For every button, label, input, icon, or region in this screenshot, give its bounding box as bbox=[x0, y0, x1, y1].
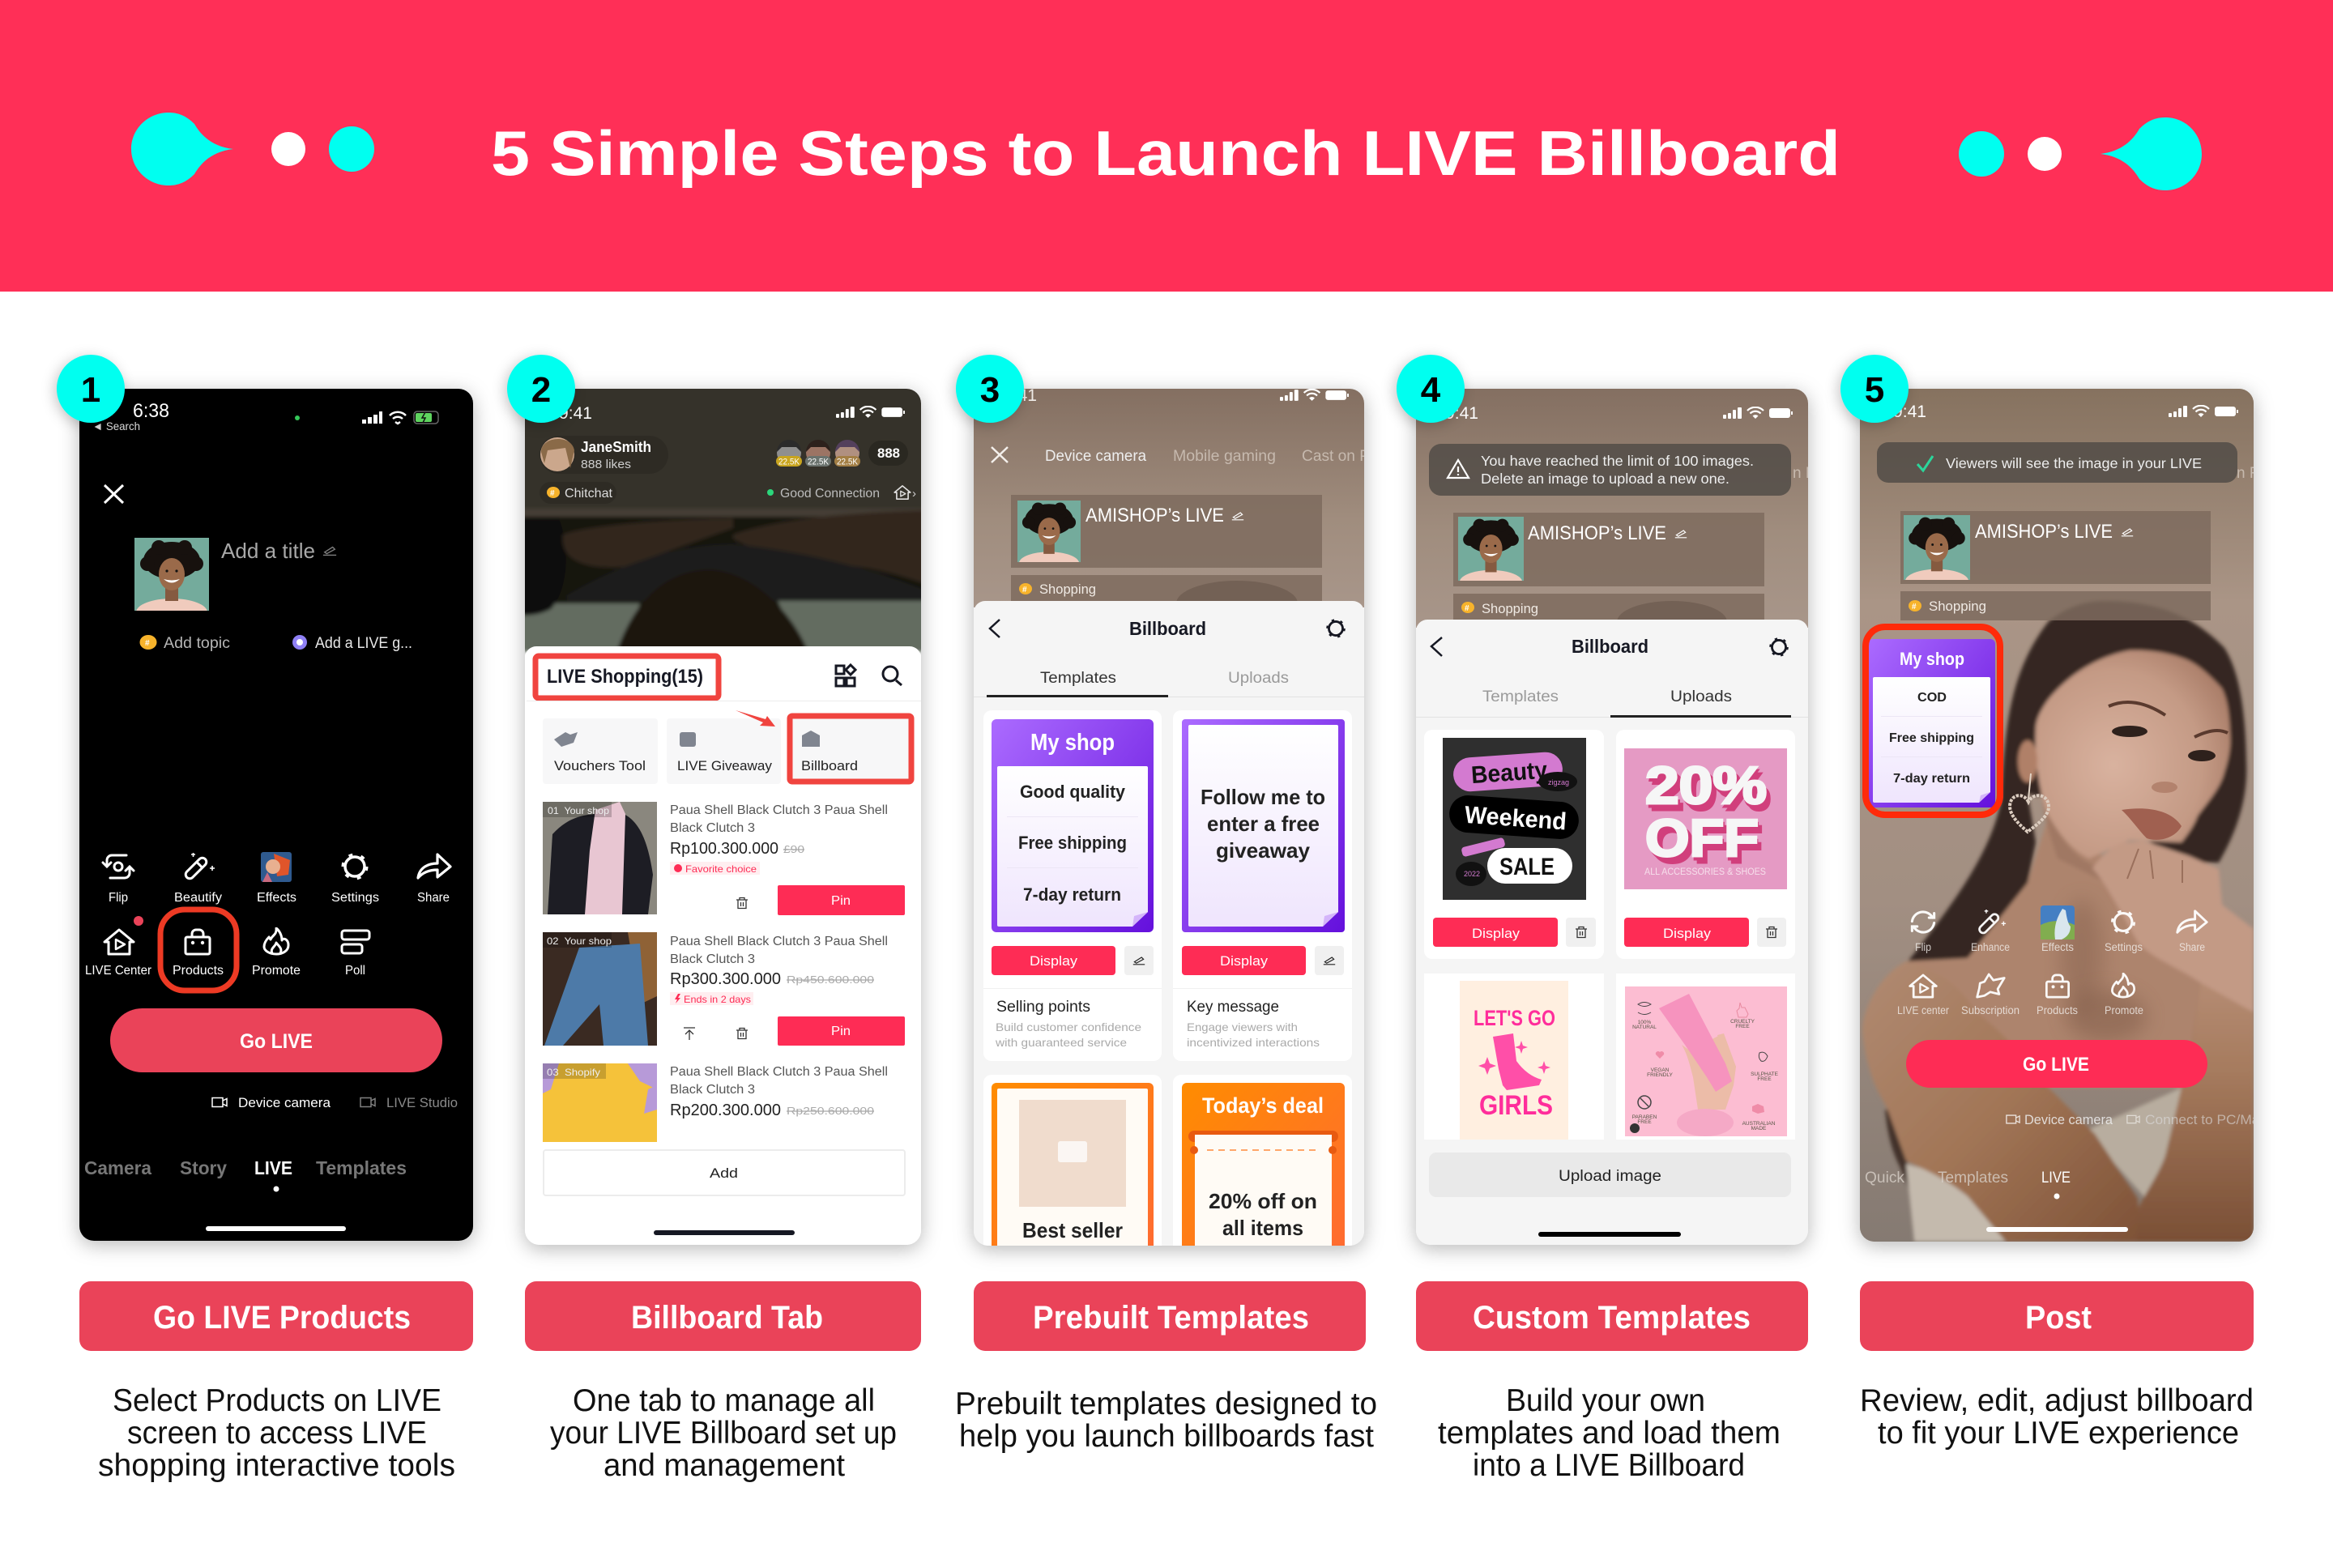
phone 3: prebuilt templates bbox=[974, 386, 1370, 1261]
step 1 heading bbox=[79, 1281, 473, 1351]
step 1 heading: Go LIVE Products bbox=[153, 1300, 411, 1336]
upload card: pink tube bbox=[1616, 974, 1795, 1140]
tool row 1: Effects bbox=[257, 891, 296, 905]
status bar: 6:38 bbox=[133, 400, 169, 422]
viewer avatars: 22.5K bbox=[837, 457, 859, 467]
product 3: Rp250.600.000 bbox=[787, 1105, 874, 1117]
mode tabs: Templates bbox=[1938, 1169, 2008, 1187]
product 2: Ends in 2 days bbox=[684, 994, 751, 1005]
title: 5 Simple Steps to Launch LIVE Billboard bbox=[491, 117, 1840, 189]
template card: today's deal bbox=[1173, 1075, 1352, 1261]
camera source options bbox=[211, 1097, 457, 1108]
shopping tag bbox=[1900, 591, 2211, 620]
template card: best seller: Best seller bbox=[1022, 1218, 1123, 1242]
mode tabs: Story bbox=[180, 1157, 227, 1178]
product 1: Pin bbox=[831, 894, 851, 908]
add a title bbox=[221, 543, 337, 559]
product 1: Paua Shell Black Clutch 3 Paua Shell bbox=[670, 803, 888, 817]
step badge 5: 5 bbox=[1865, 370, 1884, 410]
upload card: pink tube: MADE bbox=[1751, 1126, 1767, 1131]
step 1 description: shopping interactive tools bbox=[98, 1448, 455, 1483]
product 1: Favorite choice bbox=[685, 863, 757, 875]
home indicator bbox=[1986, 1227, 2128, 1232]
camera source tabs: Cast on P bbox=[1302, 448, 1370, 465]
home indicator bbox=[654, 1230, 795, 1235]
product 2: Rp450.600.000 bbox=[787, 974, 874, 986]
upload card: pink tube: FRIENDLY bbox=[1647, 1072, 1673, 1078]
camera source tabs: Mobile gaming bbox=[1173, 448, 1276, 465]
billboard overlay: My shop bbox=[1900, 649, 1964, 669]
step 1 description: Select Products on LIVE bbox=[113, 1383, 441, 1418]
live giveaway tile bbox=[678, 732, 772, 773]
step badge 4: 4 bbox=[1421, 370, 1441, 410]
status bar bbox=[1004, 386, 1349, 405]
step badge 1: 1 bbox=[81, 370, 100, 410]
tabs: Templates bbox=[1040, 670, 1116, 687]
template card: key message: giveaway bbox=[1216, 838, 1311, 863]
step 2 description: your LIVE Billboard set up bbox=[550, 1416, 897, 1451]
vouchers tile bbox=[554, 732, 645, 770]
upload card: 20% off: OFF bbox=[1648, 812, 1759, 871]
status bar: 9:41 bbox=[1004, 386, 1037, 405]
template card: key message: Display bbox=[1220, 953, 1269, 969]
home indicator bbox=[1538, 1232, 1681, 1237]
live title box bbox=[1453, 513, 1764, 594]
viewer count bbox=[868, 441, 908, 466]
shopping tag: Shopping bbox=[1039, 582, 1096, 597]
upload card: 20% off: ALL ACCESSORIES & SHOES bbox=[1644, 867, 1766, 877]
upload card: beauty weekend bbox=[1424, 730, 1604, 959]
template card: today's deal: Today’s deal bbox=[1202, 1093, 1324, 1118]
billboard tile highlighted: Billboard bbox=[801, 758, 858, 773]
status bar: ◄ Search bbox=[92, 420, 140, 432]
template card: selling points: Good quality bbox=[1020, 782, 1126, 802]
upload card: pink tube: NATURAL bbox=[1632, 1025, 1657, 1030]
status bar bbox=[94, 403, 439, 431]
product 1 bbox=[543, 802, 905, 915]
template card: key message: incentivized interactions bbox=[1187, 1036, 1320, 1049]
add a live goal: Add a LIVE g... bbox=[315, 635, 412, 652]
template card: key message: enter a free bbox=[1207, 812, 1320, 836]
shopping panel bbox=[525, 646, 921, 1250]
step 5 description: to fit your LIVE experience bbox=[1878, 1416, 2239, 1451]
icon: right decoration bbox=[1959, 117, 2202, 190]
tool row 2: Products bbox=[173, 964, 224, 978]
step 2 heading bbox=[525, 1281, 921, 1351]
tool row 2: Poll bbox=[345, 964, 365, 978]
clipped camera tab: n F bbox=[2237, 465, 2258, 482]
chitchat tag: Chitchat bbox=[565, 487, 613, 501]
product 2: Rp300.300.000 bbox=[670, 970, 781, 988]
template card: selling points: My shop bbox=[1030, 730, 1115, 756]
product 2: Pin bbox=[831, 1025, 851, 1038]
upload card: beauty weekend: 2022 bbox=[1464, 870, 1480, 878]
template card: selling points: with guaranteed service bbox=[995, 1036, 1127, 1049]
template card: selling points bbox=[983, 710, 1162, 1061]
close icon bbox=[104, 485, 123, 503]
step 3 description: Prebuilt templates designed to bbox=[955, 1387, 1377, 1421]
billboard overlay: COD bbox=[1917, 691, 1947, 705]
chitchat tag: # bbox=[550, 489, 555, 498]
template card: selling points: Build customer confidence bbox=[996, 1020, 1141, 1033]
status bar bbox=[1893, 403, 2238, 421]
template card: key message: Engage viewers with bbox=[1187, 1020, 1298, 1033]
close icon bbox=[992, 447, 1008, 462]
upload card: 20% off: 20% bbox=[1648, 759, 1768, 818]
go live button bbox=[110, 1008, 442, 1072]
step 4 description bbox=[1438, 1383, 1781, 1483]
tool row 2: Promote bbox=[252, 964, 301, 978]
arrow bbox=[736, 710, 775, 726]
billboard overlay: Free shipping bbox=[1889, 731, 1974, 745]
panel header bbox=[1431, 636, 1788, 657]
home indicator bbox=[206, 1226, 346, 1231]
add button bbox=[544, 1150, 905, 1195]
upload card: let's go girls: LET'S GO bbox=[1474, 1006, 1555, 1030]
camera source options: Device camera bbox=[2024, 1113, 2113, 1127]
product 3: Paua Shell Black Clutch 3 Paua Shell bbox=[670, 1065, 888, 1079]
host pill bbox=[540, 437, 650, 471]
tool row 1 bbox=[1912, 905, 2207, 953]
step 1 description: screen to access LIVE bbox=[127, 1416, 427, 1451]
step badge 3 bbox=[956, 355, 1024, 423]
billboard overlay bbox=[1866, 627, 2000, 815]
live shopping heading: LIVE Shopping(15) bbox=[547, 666, 703, 688]
product 1: Rp100.300.000 bbox=[670, 840, 778, 858]
background photo of woman bbox=[1860, 389, 2254, 1242]
tool row 1: Enhance bbox=[1971, 941, 2010, 953]
tabs: Uploads bbox=[1228, 670, 1289, 687]
template card: best seller bbox=[983, 1075, 1162, 1261]
background bbox=[1416, 389, 1808, 628]
template card: key message: Follow me to bbox=[1201, 785, 1325, 809]
status bar bbox=[1445, 404, 1793, 423]
product 1: Black Clutch 3 bbox=[670, 821, 755, 835]
limit warning toast bbox=[1429, 444, 1791, 496]
background bbox=[974, 389, 1364, 607]
upload card: beauty weekend: Beauty bbox=[1470, 757, 1548, 789]
tool row 2: LIVE Center bbox=[85, 964, 151, 978]
camera source tabs: Device camera bbox=[1045, 448, 1146, 465]
product 2: Paua Shell Black Clutch 3 Paua Shell bbox=[670, 935, 888, 948]
mode tabs: LIVE bbox=[2041, 1169, 2071, 1187]
template card: selling points: Free shipping bbox=[1018, 833, 1127, 853]
shopping tag: # bbox=[1465, 604, 1469, 613]
host pill: JaneSmith bbox=[581, 439, 651, 455]
upload card: pink tube: FREE bbox=[1637, 1119, 1652, 1125]
upload card: pink tube: AUSTRALIAN bbox=[1742, 1121, 1776, 1127]
tabs: Uploads bbox=[1670, 688, 1732, 705]
mode tabs: Camera bbox=[84, 1157, 151, 1178]
billboard tile highlighted bbox=[790, 716, 911, 782]
avatar bbox=[134, 538, 209, 611]
tool row 1: Share bbox=[2179, 941, 2205, 953]
upload card: let's go girls: GIRLS bbox=[1479, 1090, 1553, 1121]
template card: today's deal: 20% off on bbox=[1209, 1189, 1317, 1213]
step badge 1 bbox=[57, 355, 125, 423]
step 2 description: and management bbox=[604, 1448, 845, 1483]
camera source options: Connect to PC/Mac bbox=[2145, 1113, 2267, 1127]
confirmation toast bbox=[1877, 442, 2237, 483]
step badge 2 bbox=[507, 355, 575, 423]
add a title: Add a title bbox=[221, 539, 315, 563]
go live button: Go LIVE bbox=[240, 1030, 313, 1053]
panel header bbox=[990, 618, 1345, 639]
step 5 description: Review, edit, adjust billboard bbox=[1860, 1383, 2254, 1418]
host pill: 888 likes bbox=[581, 458, 631, 471]
upload card: beauty weekend: zigzag bbox=[1548, 778, 1569, 786]
upload card: 20% off: OFF bbox=[1645, 808, 1759, 867]
billboard panel bbox=[974, 601, 1364, 1257]
chitchat tag bbox=[547, 487, 612, 498]
step badge 5 bbox=[1840, 355, 1909, 423]
product 2: Black Clutch 3 bbox=[670, 952, 755, 966]
mode tabs: LIVE bbox=[254, 1157, 292, 1178]
upload card: beauty weekend: Weekend bbox=[1464, 802, 1567, 835]
vouchers tile: Vouchers Tool bbox=[554, 758, 646, 773]
mode tabs bbox=[84, 1157, 407, 1192]
callout: billboard highlight bbox=[1866, 627, 2000, 815]
limit warning toast: Delete an image to upload a new one. bbox=[1481, 471, 1729, 487]
product 1: £90 bbox=[783, 843, 804, 855]
template card: selling points: 7-day return bbox=[1023, 884, 1121, 905]
confirmation toast: Viewers will see the image in your LIVE bbox=[1946, 455, 2202, 471]
icon: grid bbox=[836, 665, 855, 686]
product 3 bbox=[543, 1063, 888, 1142]
step 2 heading: Billboard Tab bbox=[631, 1300, 823, 1336]
go live button: Go LIVE bbox=[2023, 1054, 2089, 1076]
shopping tag bbox=[1453, 594, 1764, 623]
upload card: pink tube: FREE bbox=[1757, 1076, 1772, 1082]
tool row 2 bbox=[1897, 974, 2143, 1016]
upload card: pink tube: SULPHATE bbox=[1751, 1072, 1779, 1077]
live title box bbox=[1011, 495, 1322, 575]
billboard panel bbox=[1416, 620, 1808, 1259]
upload card: let's go girls bbox=[1424, 974, 1604, 1140]
product 3: Rp200.300.000 bbox=[670, 1101, 781, 1119]
upload card: 20% off: 20% bbox=[1651, 762, 1771, 821]
tool row 1: Settings bbox=[331, 891, 379, 905]
shopping tag: Shopping bbox=[1482, 601, 1538, 616]
step 5 heading bbox=[1860, 1281, 2254, 1351]
add topic: # bbox=[145, 639, 150, 648]
step 3 heading bbox=[974, 1281, 1366, 1351]
callout: products highlight bbox=[160, 910, 237, 991]
step 4 description: into a LIVE Billboard bbox=[1473, 1448, 1745, 1483]
background photo bbox=[518, 382, 928, 652]
phone 2: live shopping panel bbox=[518, 382, 928, 1250]
step badge 3: 3 bbox=[980, 370, 1000, 410]
billboard overlay: 7-day return bbox=[1893, 772, 1970, 786]
tool row 2: Products bbox=[2037, 1004, 2078, 1016]
add button: Add bbox=[710, 1165, 738, 1181]
panel header: Billboard bbox=[1572, 636, 1648, 657]
product 2: 02 Your shop bbox=[547, 935, 612, 947]
step 1 description bbox=[98, 1383, 455, 1483]
phone 4: custom templates bbox=[1416, 389, 1815, 1259]
panel header: Billboard bbox=[1129, 618, 1206, 639]
live title box: AMISHOP’s LIVE bbox=[1975, 521, 2113, 543]
tool row 2 bbox=[85, 916, 369, 978]
template card: key message bbox=[1173, 710, 1352, 1061]
icon: left decoration bbox=[131, 113, 374, 185]
step badge 4 bbox=[1397, 355, 1465, 423]
viewer avatars: 22.5K bbox=[778, 457, 800, 467]
header banner bbox=[0, 0, 2333, 292]
upload card: pink tube: CRUELTY bbox=[1730, 1019, 1755, 1025]
add topic: Add topic bbox=[164, 635, 230, 652]
status bar: 9:41 bbox=[1445, 404, 1478, 423]
upload card: 20% off: Display bbox=[1663, 926, 1712, 941]
step 3 heading: Prebuilt Templates bbox=[1033, 1300, 1309, 1336]
product 2 bbox=[543, 932, 905, 1046]
mode tabs bbox=[1865, 1169, 2071, 1199]
upload card: 20% off: OFF bbox=[1651, 815, 1763, 874]
step 3 description: help you launch billboards fast bbox=[959, 1419, 1374, 1454]
step badge 2: 2 bbox=[531, 370, 551, 410]
template card: selling points: Display bbox=[1030, 953, 1078, 969]
tabs bbox=[974, 670, 1364, 697]
shopping tag: Shopping bbox=[1929, 599, 1986, 614]
shopping tag: # bbox=[1912, 603, 1917, 611]
tool row 1: Share bbox=[417, 891, 450, 905]
connection status: › bbox=[912, 487, 916, 501]
phone 5: post preview bbox=[1860, 389, 2267, 1242]
live giveaway tile: LIVE Giveaway bbox=[677, 758, 772, 773]
upload card: 20% off bbox=[1616, 730, 1795, 959]
step 4 heading: Custom Templates bbox=[1473, 1300, 1751, 1336]
mode tabs: Quick bbox=[1865, 1169, 1904, 1187]
upload card: beauty weekend: SALE bbox=[1499, 854, 1555, 880]
step 5 heading: Post bbox=[2025, 1300, 2092, 1336]
viewer avatars bbox=[776, 440, 860, 467]
connection status bbox=[767, 486, 916, 501]
limit warning toast: You have reached the limit of 100 images. bbox=[1481, 453, 1754, 469]
step 2 description bbox=[550, 1383, 897, 1483]
tool row 2: Promote bbox=[2105, 1004, 2143, 1016]
product 3: 03 Shopify bbox=[547, 1067, 600, 1078]
upload image button: Upload image bbox=[1559, 1168, 1661, 1185]
camera source tabs bbox=[1045, 448, 1370, 465]
step 5 description bbox=[1860, 1383, 2254, 1451]
connection status: Good Connection bbox=[780, 487, 880, 501]
step 4 description: templates and load them bbox=[1438, 1416, 1781, 1451]
upload card: beauty weekend: Display bbox=[1472, 926, 1521, 941]
step 4 heading bbox=[1416, 1281, 1808, 1351]
live title box: AMISHOP’s LIVE bbox=[1528, 522, 1666, 544]
upload card: pink tube: VEGAN bbox=[1651, 1067, 1670, 1073]
status bar: 9:41 bbox=[559, 404, 592, 423]
upload card: pink tube: 100% bbox=[1638, 1020, 1652, 1025]
tool row 1: Effects bbox=[2041, 941, 2074, 953]
status bar bbox=[561, 406, 905, 419]
camera source options bbox=[2007, 1113, 2267, 1127]
tool row 1: Flip bbox=[109, 891, 128, 905]
tool row 2: Subscription bbox=[1961, 1004, 2020, 1016]
viewer count: 888 bbox=[877, 445, 900, 461]
phone 1: go live screen bbox=[79, 389, 473, 1241]
step 3 description bbox=[955, 1387, 1377, 1454]
tool row 1: Flip bbox=[1915, 941, 1931, 953]
viewer avatars: 22.5K bbox=[808, 457, 830, 467]
camera source options: LIVE Studio bbox=[386, 1095, 458, 1110]
status bar: 9:41 bbox=[1893, 403, 1926, 421]
shopping tag: # bbox=[1022, 586, 1027, 594]
template card: today's deal: all items bbox=[1222, 1216, 1303, 1240]
tabs bbox=[1416, 688, 1808, 718]
step 2 description: One tab to manage all bbox=[573, 1383, 875, 1418]
live shopping heading bbox=[535, 656, 719, 698]
icon: search bbox=[883, 667, 902, 685]
template card: selling points: Selling points bbox=[996, 999, 1090, 1016]
upload card: pink tube: FREE bbox=[1735, 1024, 1750, 1029]
upload card: 20% off: 20% bbox=[1645, 756, 1767, 815]
clipped camera tab: n F bbox=[1793, 465, 1815, 482]
tool row 2: LIVE center bbox=[1897, 1004, 1949, 1016]
tool row 1: Settings bbox=[2105, 941, 2143, 953]
product 1: 01 Your shop bbox=[548, 805, 609, 816]
template card: key message: Key message bbox=[1187, 999, 1279, 1016]
tabs: Templates bbox=[1482, 688, 1559, 705]
go live button bbox=[1906, 1040, 2207, 1088]
mode tabs: Templates bbox=[316, 1157, 407, 1178]
live title box: AMISHOP’s LIVE bbox=[1085, 505, 1224, 526]
shopping tag bbox=[1011, 575, 1322, 604]
product 3: Black Clutch 3 bbox=[670, 1083, 755, 1097]
live title box bbox=[1900, 511, 2211, 594]
upload card: pink tube: PARABEN bbox=[1632, 1114, 1657, 1120]
camera source options: Device camera bbox=[238, 1095, 331, 1110]
tool row 1 bbox=[103, 852, 450, 905]
tool row 1: Beautify bbox=[174, 891, 222, 905]
upload image button bbox=[1429, 1153, 1791, 1197]
step 4 description: Build your own bbox=[1506, 1383, 1705, 1418]
